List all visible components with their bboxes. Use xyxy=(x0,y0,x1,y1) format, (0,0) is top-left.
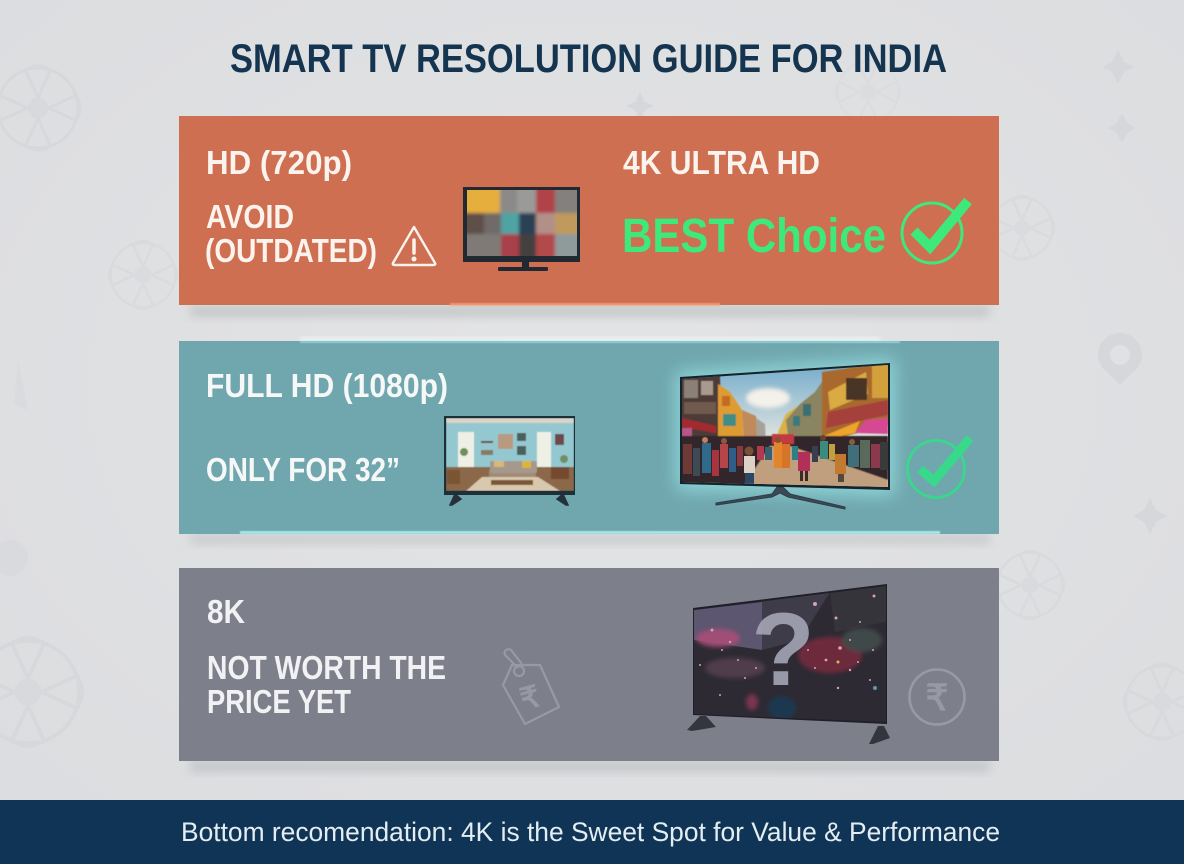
panel: HD and 4K xyxy=(179,116,999,317)
title: SMART TV RESOLUTION GUIDE FOR INDIA xyxy=(230,37,947,81)
icon: pixelated HD TV xyxy=(460,185,582,271)
panel: Full HD xyxy=(179,337,999,544)
text: only for 32 inch: ONLY FOR 32” xyxy=(206,451,400,488)
heading: 8K: 8K xyxy=(207,593,245,630)
footer text: Bottom recomendation: 4K is the Sweet Spot for Value & Performance xyxy=(181,817,1000,847)
8K TV with question mark xyxy=(687,584,890,744)
heading: HD 720p: HD (720p) xyxy=(206,144,352,181)
icon: rupee price tag: ₹ xyxy=(517,680,544,717)
small TV: living room xyxy=(444,416,575,505)
text: not worth the price yet: NOT WORTH THE xyxy=(207,649,446,686)
icon: rupee circle xyxy=(910,670,964,724)
text: avoid outdated: AVOID xyxy=(206,198,294,235)
icon: rupee price tag xyxy=(503,649,559,724)
question mark: ? xyxy=(751,592,815,708)
text: best choice: BEST Choice xyxy=(622,210,886,263)
text: not worth the price yet xyxy=(207,649,446,720)
icon: warning triangle xyxy=(393,227,435,265)
icon: green check xyxy=(902,201,968,263)
icon: teal check xyxy=(908,438,970,498)
panel: 8K xyxy=(179,568,999,772)
heading: 4K Ultra HD: 4K ULTRA HD xyxy=(623,144,820,181)
text: not worth the price yet: PRICE YET xyxy=(207,683,351,720)
footer banner xyxy=(0,800,1184,864)
text: avoid outdated: (OUTDATED) xyxy=(205,232,377,269)
icon: rupee circle: ₹ xyxy=(926,677,948,718)
large TV: Indian street scene with glow xyxy=(676,358,895,509)
text: avoid outdated xyxy=(205,198,377,269)
heading: Full HD 1080p: FULL HD (1080p) xyxy=(206,367,448,404)
